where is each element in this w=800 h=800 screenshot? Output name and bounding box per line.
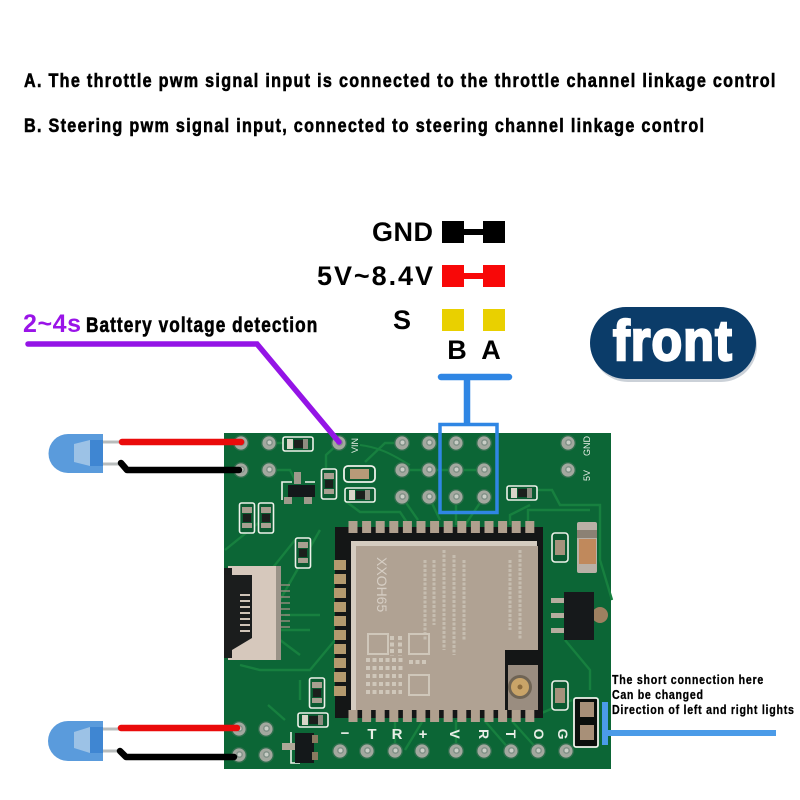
silkscreen labels: O <box>531 729 547 740</box>
copper traces <box>225 443 612 750</box>
through holes <box>231 435 576 763</box>
column label B: B <box>447 335 467 365</box>
short connection callout text <box>612 673 794 717</box>
silkscreen labels <box>341 436 592 743</box>
black wire <box>121 463 239 470</box>
short connection callout text: Can be changed <box>612 688 703 702</box>
bottom LED with wires <box>48 721 237 761</box>
silkscreen labels: R <box>392 726 403 743</box>
blue bracket over A/B pins <box>440 377 509 512</box>
short-connection pads <box>574 698 598 747</box>
antenna connector <box>508 665 538 710</box>
legend swatch: voltage red pins <box>442 265 505 287</box>
silkscreen labels: V <box>447 729 463 739</box>
legend swatch: signal yellow pins <box>442 309 505 331</box>
module markings <box>374 550 520 655</box>
large capacitor <box>577 522 597 573</box>
silkscreen labels: GND <box>582 436 592 456</box>
purple leader line to VIN <box>28 344 339 442</box>
top LED with wires <box>48 434 241 473</box>
red wire <box>121 725 237 731</box>
legend label: signal: S <box>393 305 411 335</box>
short connection callout text: Direction of left and right lights <box>612 703 794 717</box>
transistor bottom left <box>282 732 318 763</box>
silkscreen labels: VIN <box>350 438 360 453</box>
silkscreen labels: G <box>555 729 571 740</box>
small SMD parts <box>240 437 568 727</box>
wireless module <box>334 521 543 722</box>
transistor top left <box>282 472 315 504</box>
badge: front: front <box>613 309 732 373</box>
pin legend <box>317 217 505 365</box>
metal shield <box>351 541 537 710</box>
silkscreen labels: − <box>341 725 350 742</box>
blue callout line <box>605 702 776 745</box>
FPC connector <box>224 566 290 660</box>
silkscreen labels: R <box>476 729 492 739</box>
instruction line B: B. Steering pwm signal input, connected to steering channel linkage control <box>24 115 704 136</box>
black wire <box>120 751 234 757</box>
short connection callout text: The short connection here <box>612 673 764 687</box>
silkscreen labels: T <box>367 726 377 743</box>
badge: front <box>590 307 757 382</box>
red wire <box>122 439 241 445</box>
QR code <box>366 634 429 695</box>
module left pads <box>334 560 346 696</box>
battery voltage label: Battery voltage detection <box>86 315 317 337</box>
silkscreen labels: T <box>503 730 519 739</box>
legend label: voltage: 5V~8.4V <box>317 261 433 291</box>
module top pads <box>348 521 534 533</box>
module markings: XXOH65 <box>374 557 390 612</box>
silkscreen labels: + <box>419 726 428 743</box>
instruction line A: A. The throttle pwm signal input is connected to the throttle channel linkage control <box>24 70 775 91</box>
silkscreen labels: 5V <box>582 470 592 481</box>
legend label: GND: GND <box>372 217 433 247</box>
legend swatch: GND black pins <box>442 221 505 243</box>
column label A: A <box>481 335 501 365</box>
PCB board <box>224 433 612 769</box>
regulator <box>551 592 608 640</box>
battery voltage label <box>23 310 317 338</box>
module bottom pads <box>348 710 534 722</box>
battery voltage label: 2~4s <box>23 310 81 338</box>
